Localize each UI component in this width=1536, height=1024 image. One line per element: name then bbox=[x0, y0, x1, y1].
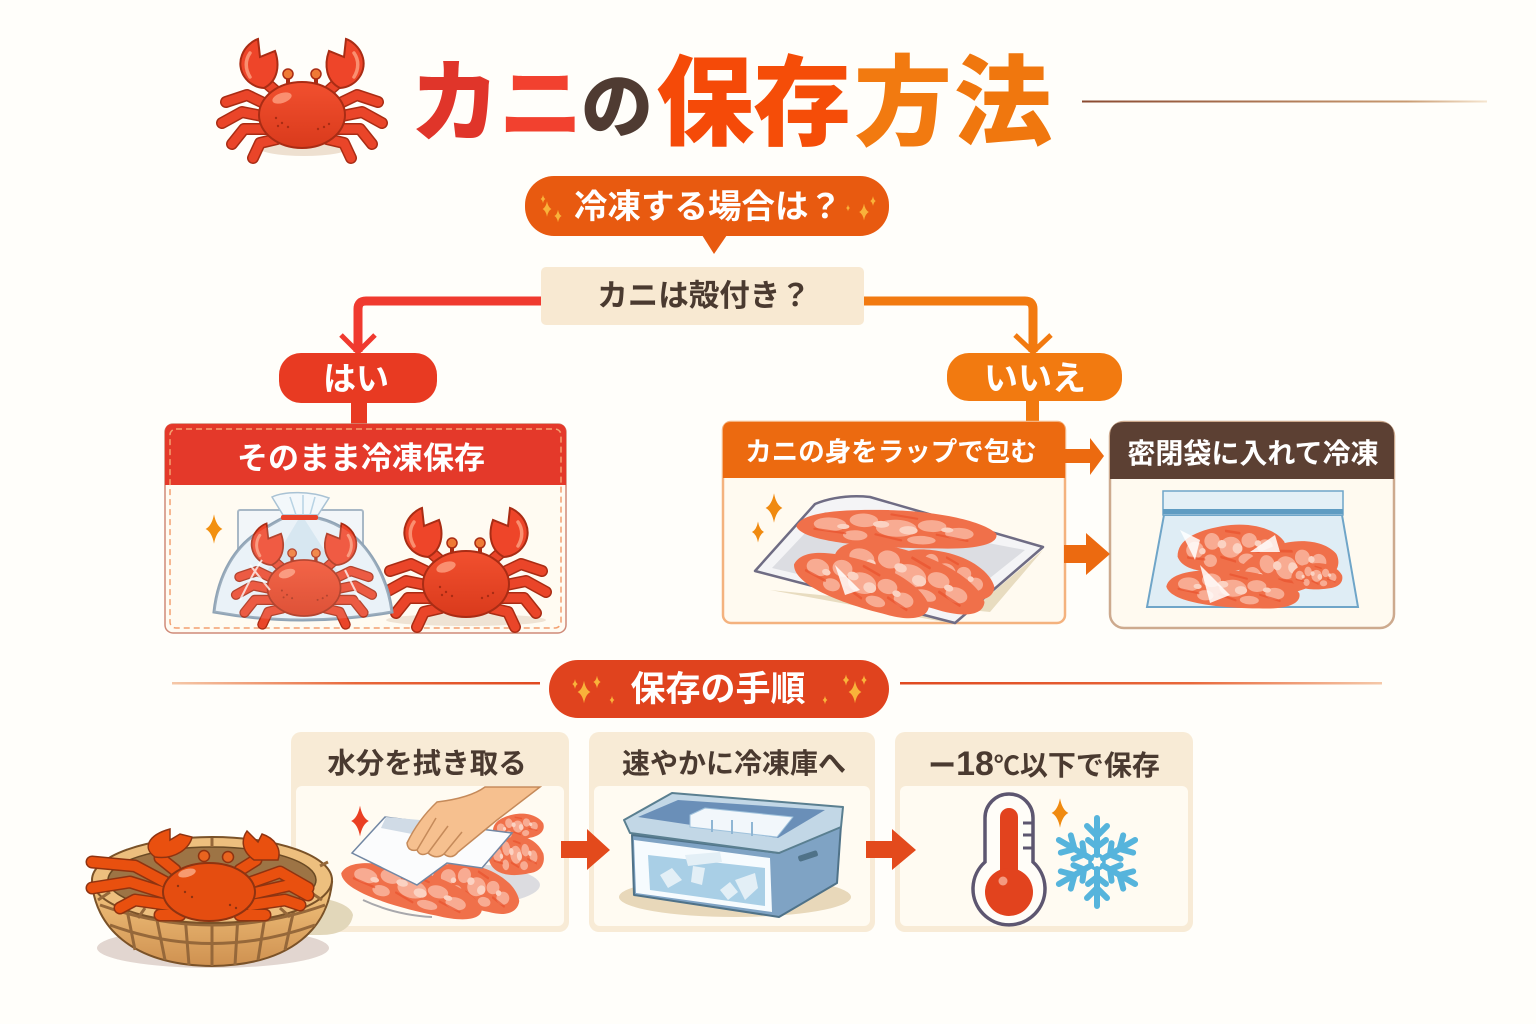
panel: freeze as is bbox=[165, 424, 566, 633]
icon: sparkle bbox=[351, 806, 369, 836]
icon: basket with crab bbox=[92, 829, 353, 968]
step card: store at -18C: ー18℃以下で保存 bbox=[928, 745, 1160, 783]
title: の bbox=[581, 68, 653, 148]
arrow: wrap to bag lower bbox=[1064, 533, 1110, 575]
panel: wrap in plastic bbox=[723, 422, 1065, 627]
icon: title crab bbox=[222, 39, 382, 158]
title: 保 bbox=[656, 48, 754, 158]
icon: sparkle bbox=[206, 514, 222, 544]
icon: crab in bag bbox=[214, 493, 392, 625]
icon: sparkle bbox=[1052, 798, 1068, 828]
title: 法 bbox=[954, 48, 1052, 158]
icon: sealed bag with meat bbox=[1147, 491, 1358, 611]
icon: hand wiping crab meat bbox=[337, 787, 545, 926]
step card: wipe moisture: 水分を拭き取る bbox=[327, 748, 527, 780]
arrow: yes branch bbox=[341, 301, 541, 352]
section heading pill: 保存の手順 bbox=[630, 670, 806, 709]
title: カ bbox=[410, 54, 500, 154]
panel: put in sealed bag bbox=[1110, 422, 1394, 628]
step card: into freezer bbox=[589, 732, 875, 932]
panel header bbox=[1110, 422, 1394, 479]
panel: wrap in plastic: カニの身をラップで包む bbox=[745, 437, 1037, 467]
panel header bbox=[723, 422, 1065, 478]
title bbox=[410, 48, 1052, 158]
arrow: step 2 to 3 bbox=[866, 829, 916, 870]
section heading pill bbox=[549, 660, 889, 718]
title rule bbox=[1082, 100, 1487, 102]
panel: put in sealed bag: 密閉袋に入れて冷凍 bbox=[1127, 438, 1379, 469]
question box: カニは殻付き？ bbox=[597, 279, 811, 313]
panel: freeze as is: そのまま冷凍保存 bbox=[237, 441, 485, 476]
arrow: step 1 to 2 bbox=[561, 829, 610, 870]
step card: store at -18C bbox=[895, 732, 1193, 932]
title: 方 bbox=[854, 48, 952, 158]
section divider lines bbox=[172, 682, 1382, 684]
icon: sparkles bbox=[752, 493, 782, 542]
yes pill bbox=[279, 353, 437, 426]
crab in basket bbox=[92, 858, 308, 915]
panel header bbox=[165, 424, 566, 485]
yes pill: はい bbox=[323, 360, 389, 397]
no pill: いいえ bbox=[984, 360, 1086, 398]
icon: thermometer bbox=[973, 794, 1045, 925]
icon: wrapped crab meat bbox=[755, 496, 1043, 627]
icon: crab loose bbox=[386, 508, 546, 627]
title: ニ bbox=[499, 58, 583, 152]
question box bbox=[541, 267, 864, 325]
no pill bbox=[947, 353, 1122, 424]
arrow: no branch bbox=[864, 301, 1051, 352]
step card: wipe moisture bbox=[291, 732, 569, 932]
speech bubble: when freezing: 冷凍する場合は？ bbox=[574, 189, 842, 226]
step card: into freezer: 速やかに冷凍庫へ bbox=[622, 748, 846, 779]
arrow: wrap to bag upper bbox=[1065, 438, 1104, 475]
title: 存 bbox=[753, 48, 851, 158]
icon: freezer box bbox=[619, 793, 851, 917]
icon: snowflake bbox=[1054, 818, 1140, 906]
speech bubble: when freezing bbox=[525, 176, 889, 254]
